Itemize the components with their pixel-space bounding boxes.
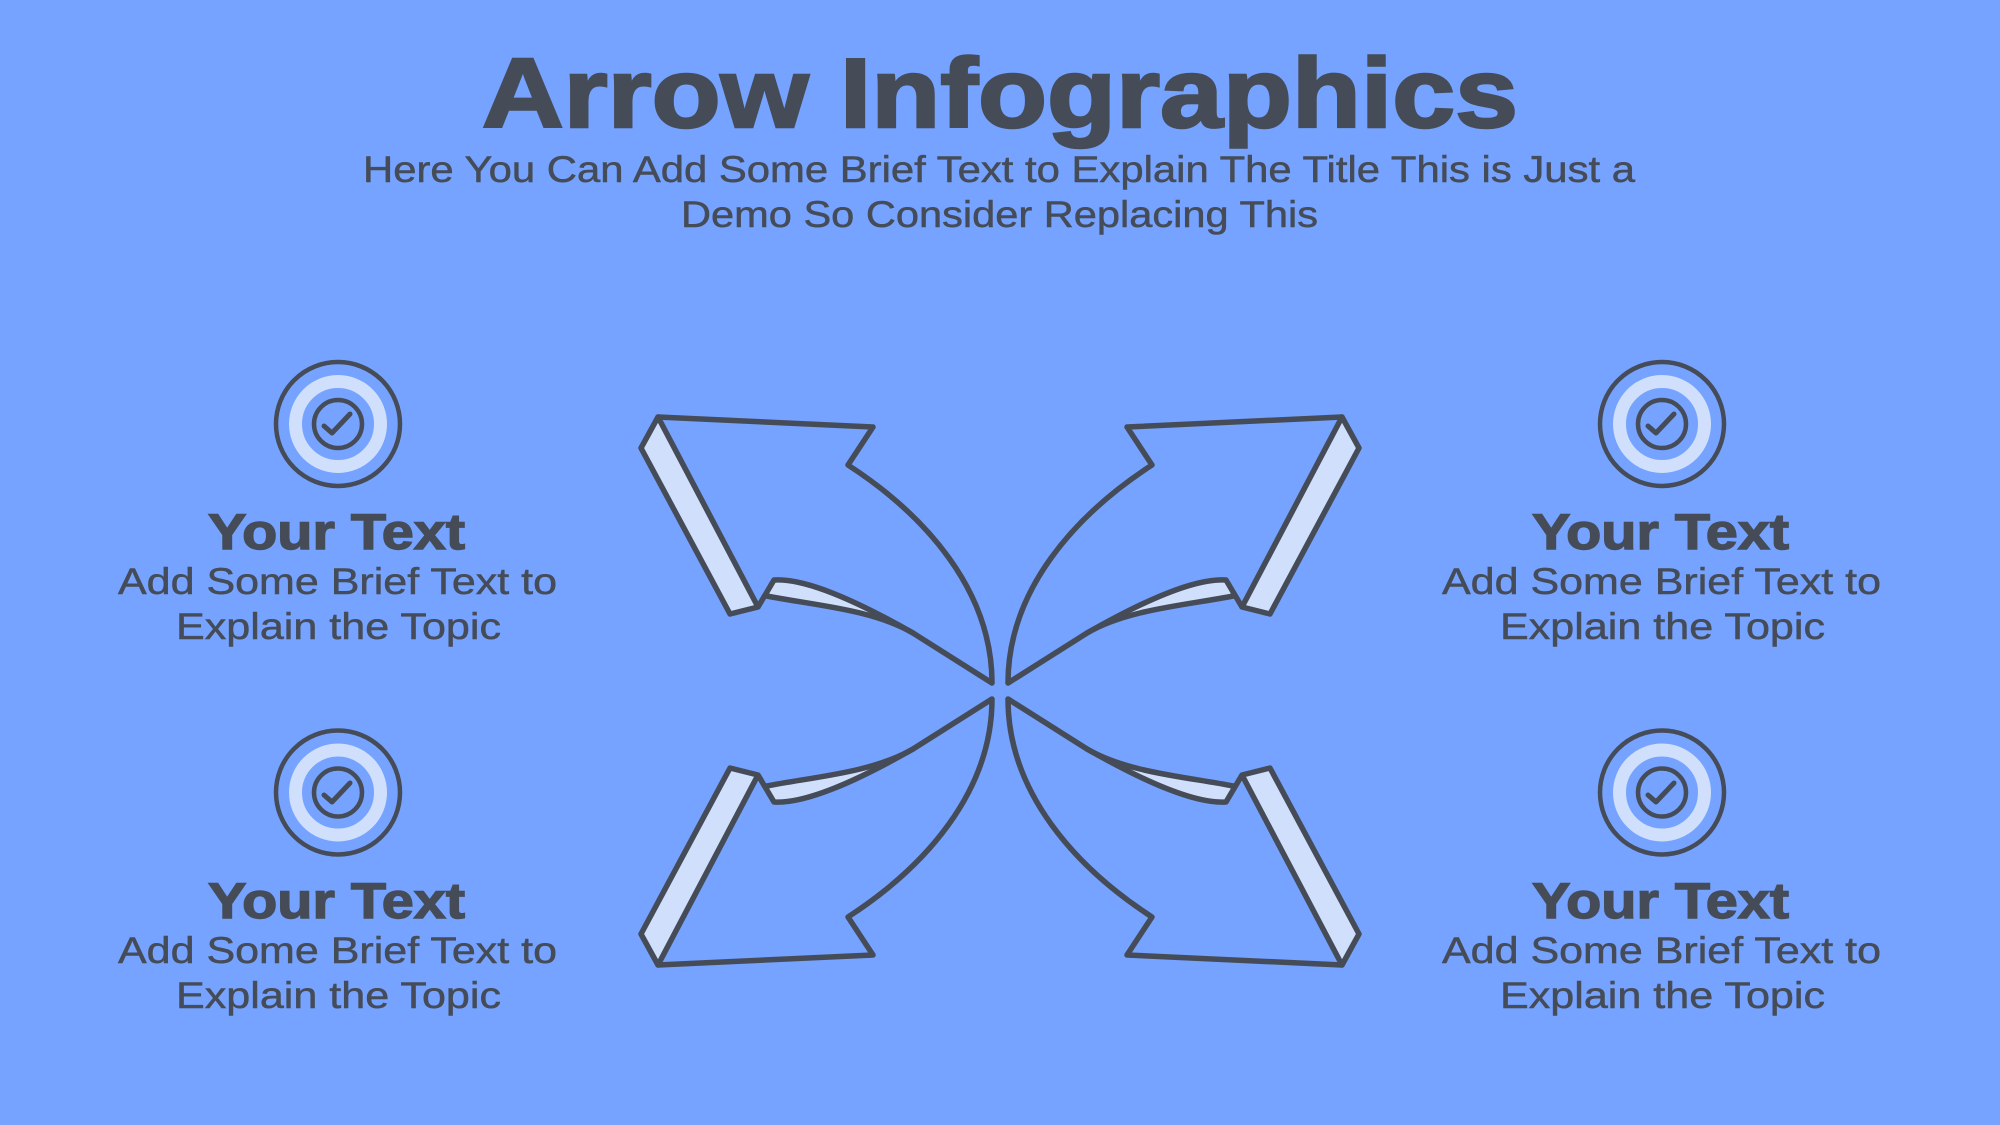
subtitle — [363, 149, 1635, 235]
heading: top right: Your Text — [1532, 504, 1789, 560]
text: top left: Add Some Brief Text to — [118, 561, 557, 602]
text: bottom right — [1442, 930, 1881, 1016]
text: bottom left — [118, 930, 557, 1016]
subtitle: Demo So Consider Replacing This — [681, 194, 1318, 235]
text: bottom left: Add Some Brief Text to — [118, 930, 557, 971]
text: top left: Explain the Topic — [176, 606, 501, 647]
icon: check badge bottom right — [1600, 730, 1724, 854]
icon: check badge top left — [276, 362, 400, 486]
text: bottom right: Explain the Topic — [1500, 975, 1825, 1016]
text: bottom left: Explain the Topic — [176, 975, 501, 1016]
text: top right: Explain the Topic — [1500, 606, 1825, 647]
panel: bottom left item — [118, 730, 557, 1016]
arrow: top right — [1008, 417, 1359, 683]
arrow: bottom right — [1008, 699, 1359, 965]
subtitle: Here You Can Add Some Brief Text to Explain The Title This is Just a — [363, 149, 1635, 190]
text: top right: Add Some Brief Text to — [1442, 561, 1881, 602]
title: Arrow Infographics — [482, 38, 1518, 148]
heading: bottom left: Your Text — [208, 873, 465, 929]
icon: check badge top right — [1600, 362, 1724, 486]
text: top left — [118, 561, 557, 647]
text: top right — [1442, 561, 1881, 647]
icon: check badge bottom left — [276, 730, 400, 854]
text: bottom right: Add Some Brief Text to — [1442, 930, 1881, 971]
panel: top left item — [118, 362, 557, 647]
heading: bottom right: Your Text — [1532, 873, 1789, 929]
panel: bottom right item — [1442, 730, 1881, 1016]
panel: top right item — [1442, 362, 1881, 647]
heading: top left: Your Text — [208, 504, 465, 560]
arrow: bottom left — [641, 699, 992, 965]
arrow: top left — [641, 417, 992, 683]
